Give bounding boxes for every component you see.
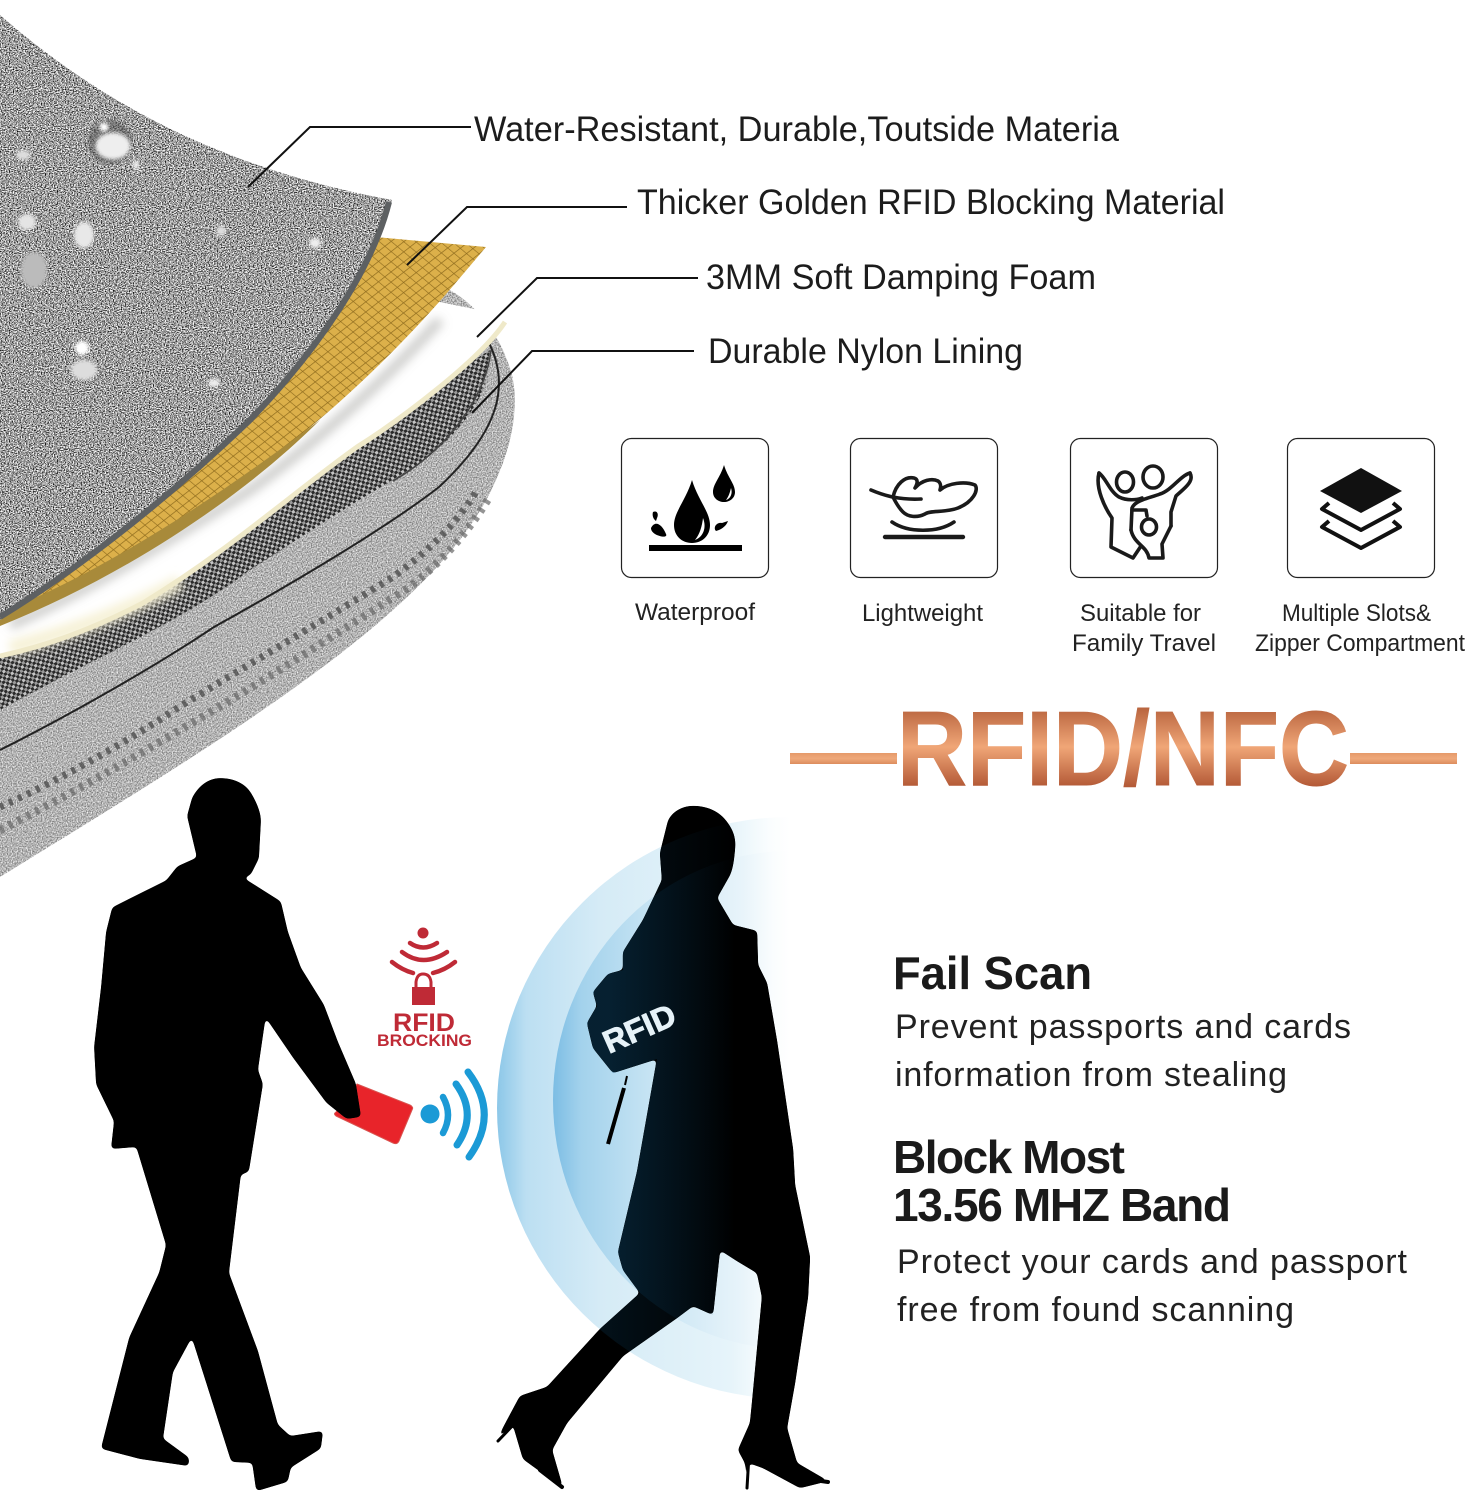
gold shadow edge <box>0 420 320 626</box>
callout text: 3MM Soft Damping Foam <box>706 258 1096 297</box>
leader line <box>477 278 698 337</box>
lining callout edge <box>393 350 491 481</box>
foam edge <box>0 322 505 656</box>
signal arcs <box>392 943 455 988</box>
bag tassel <box>608 1076 627 1144</box>
icon: stacked layers <box>1320 468 1402 548</box>
leader line <box>248 127 471 187</box>
text block: fail scan <box>893 947 1351 1094</box>
icon: family <box>1098 466 1191 558</box>
figure: woman with RFID bag inside blue shield <box>496 806 830 1490</box>
feature: waterproof <box>622 438 768 626</box>
foam cream glow <box>10 582 180 648</box>
outer shell with herringbone weave <box>0 285 515 877</box>
stiletto heels <box>498 1420 828 1488</box>
text block: block most band <box>893 1131 1408 1329</box>
icon box <box>850 438 998 578</box>
signal dot <box>420 1104 440 1124</box>
signal dot <box>418 928 428 938</box>
callout text: Thicker Golden RFID Blocking Material <box>637 183 1225 222</box>
figure: man holding red card <box>95 779 413 1490</box>
panel: layered fabric cross-section <box>0 15 515 877</box>
label: Multiple Slots& <box>1282 600 1431 627</box>
padlock body <box>412 987 435 1005</box>
bag RFID label: RFID <box>597 997 681 1060</box>
callout text: Durable Nylon Lining <box>708 332 1023 371</box>
outer grey water-resistant fabric <box>0 15 392 620</box>
red card <box>334 1084 413 1144</box>
description: free from found scanning <box>897 1291 1294 1329</box>
label: Waterproof <box>635 599 755 626</box>
left rule <box>790 753 897 764</box>
inner shield arc <box>553 851 1027 1349</box>
golden RFID blocking layer <box>0 237 486 618</box>
callout text: Water-Resistant, Durable,Toutside Materia <box>474 110 1120 149</box>
icon: RFID blocking logo <box>377 928 472 1050</box>
callout: water-resistant fabric <box>248 110 1120 187</box>
feature: lightweight <box>850 438 998 627</box>
logo text BROCKING: BROCKING <box>377 1031 472 1050</box>
shield tint over silhouette <box>587 834 718 1352</box>
icon: water drops <box>649 465 742 551</box>
label: Lightweight <box>862 600 983 627</box>
description: Protect your cards and passport <box>897 1243 1408 1281</box>
leader line <box>472 351 694 413</box>
heading: Fail Scan <box>893 947 1092 999</box>
callout: foam <box>477 258 1096 337</box>
dark fabric edge <box>0 202 389 617</box>
callout: nylon lining <box>472 332 1023 413</box>
signal arcs <box>443 1097 448 1133</box>
leader line <box>407 207 627 265</box>
description: information from stealing <box>895 1056 1287 1094</box>
icon: blue NFC signal <box>420 1072 484 1157</box>
label: Suitable for <box>1080 600 1201 627</box>
heading: RFID/NFC <box>790 690 1457 808</box>
description: Prevent passports and cards <box>895 1008 1351 1046</box>
icon: feather <box>871 478 976 537</box>
outer shield arc <box>497 817 1083 1399</box>
icon box <box>1070 438 1218 578</box>
feature: family travel <box>1070 438 1218 657</box>
heading text: RFID/NFC <box>897 690 1349 808</box>
woman silhouette <box>497 806 828 1490</box>
water droplets <box>16 120 321 387</box>
feature: multiple slots <box>1255 438 1465 657</box>
seam line <box>0 343 499 750</box>
icon box <box>1288 438 1434 578</box>
nylon lining mesh <box>0 350 490 710</box>
label: Family Travel <box>1072 630 1216 657</box>
man silhouette <box>95 779 360 1490</box>
heading: Block Most <box>893 1131 1125 1183</box>
icon box <box>622 438 768 578</box>
foam shadow <box>10 320 440 625</box>
zipper rows <box>0 488 490 830</box>
right rule <box>1350 753 1457 764</box>
damping foam layer <box>0 300 505 658</box>
logo text RFID: RFID <box>393 1009 455 1037</box>
heading: 13.56 MHZ Band <box>893 1179 1231 1231</box>
callout: golden RFID material <box>407 183 1225 265</box>
